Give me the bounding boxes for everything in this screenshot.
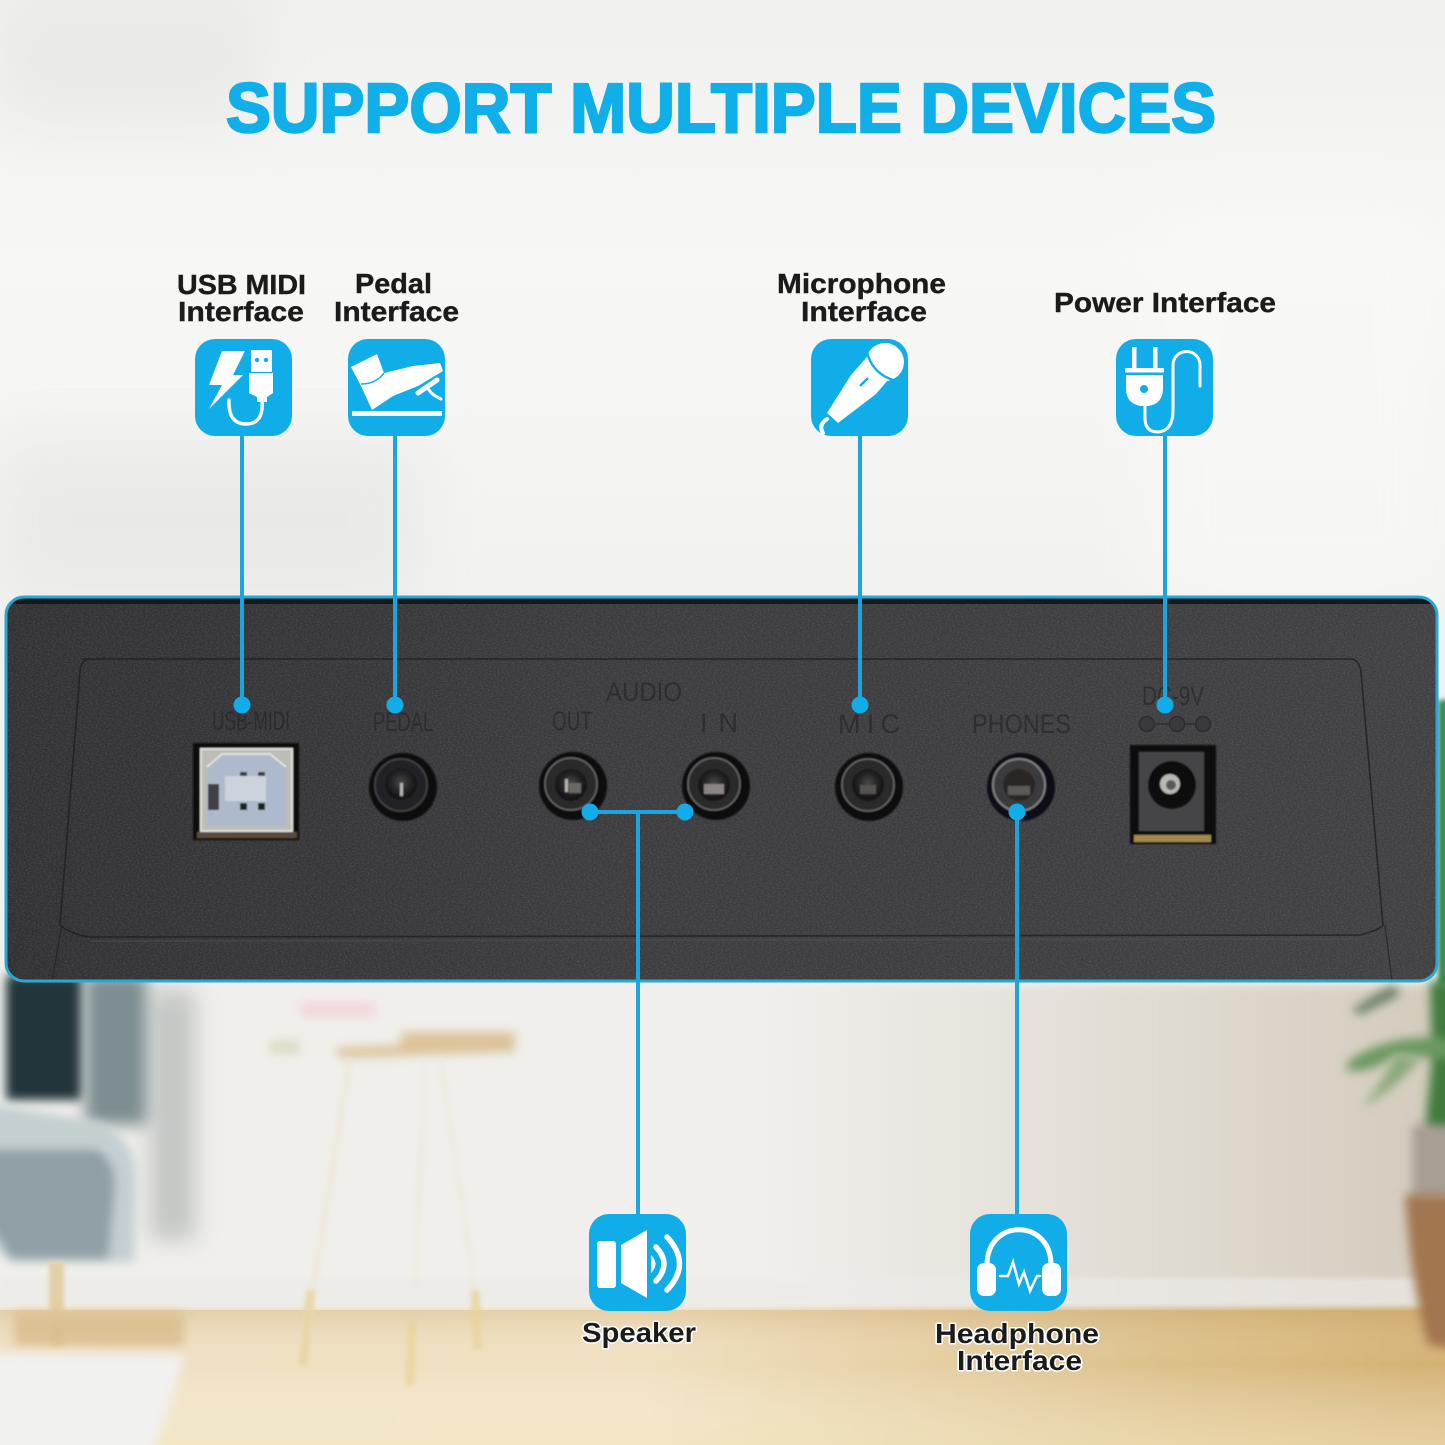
headphone jack: [987, 753, 1055, 821]
icon: USB plug: [195, 339, 292, 436]
embossed port markings: DC-9V: [1142, 681, 1204, 711]
blurred plant and pot: [1345, 700, 1445, 1350]
embossed port markings: PEDAL: [373, 707, 433, 737]
label: speaker: Speaker: [582, 1317, 696, 1348]
label: headphone interface: Interface: [957, 1345, 1082, 1376]
blurred chair: [0, 975, 195, 1445]
connector: pedal: [386, 436, 404, 714]
icon: headphones with waveform: [970, 1214, 1067, 1311]
connector: microphone: [852, 436, 868, 714]
label: USB MIDI interface: USB MIDI: [177, 269, 306, 300]
embossed port markings: [212, 677, 1210, 739]
icon: microphone: [811, 339, 908, 436]
label: pedal interface: Pedal: [355, 268, 432, 299]
label: microphone interface: Interface: [801, 296, 927, 327]
DC power jack: [1130, 745, 1216, 844]
label: power interface: Power Interface: [1054, 287, 1276, 318]
icon: foot on pedal: [348, 339, 445, 436]
microphone jack: [835, 753, 903, 821]
label: microphone interface: Microphone: [777, 268, 946, 299]
embossed port markings: IN: [700, 708, 738, 738]
label: USB MIDI interface: Interface: [178, 296, 304, 327]
embossed port markings: PHONES: [972, 709, 1071, 739]
label: USB MIDI interface: [177, 269, 306, 327]
label: headphone interface: [935, 1318, 1099, 1376]
embossed port markings: AUDIO: [606, 677, 682, 707]
USB type-B port: [193, 743, 299, 840]
audio in jack: [682, 752, 750, 820]
blurred side table: [270, 1002, 515, 1385]
connector: power: [1156, 436, 1174, 714]
icon: speaker: [589, 1214, 686, 1311]
title: SUPPORT MULTIPLE DEVICES: [226, 69, 1216, 147]
panel: keyboard rear connector plate: [6, 597, 1437, 981]
connector: headphone: [1008, 804, 1026, 1216]
label: pedal interface: Interface: [334, 296, 459, 327]
label: pedal interface: [334, 268, 459, 327]
connector: speaker: [582, 804, 694, 1216]
audio out jack: [539, 752, 607, 820]
icon: power plug: [1116, 339, 1213, 436]
pedal jack: [369, 753, 437, 821]
connector: USB MIDI: [234, 436, 250, 714]
embossed port markings: USB-MIDI: [212, 706, 290, 736]
embossed port markings: OUT: [552, 706, 592, 736]
label: microphone interface: [777, 268, 946, 327]
embossed port markings: MIC: [838, 709, 900, 739]
label: headphone interface: Headphone: [935, 1318, 1099, 1349]
